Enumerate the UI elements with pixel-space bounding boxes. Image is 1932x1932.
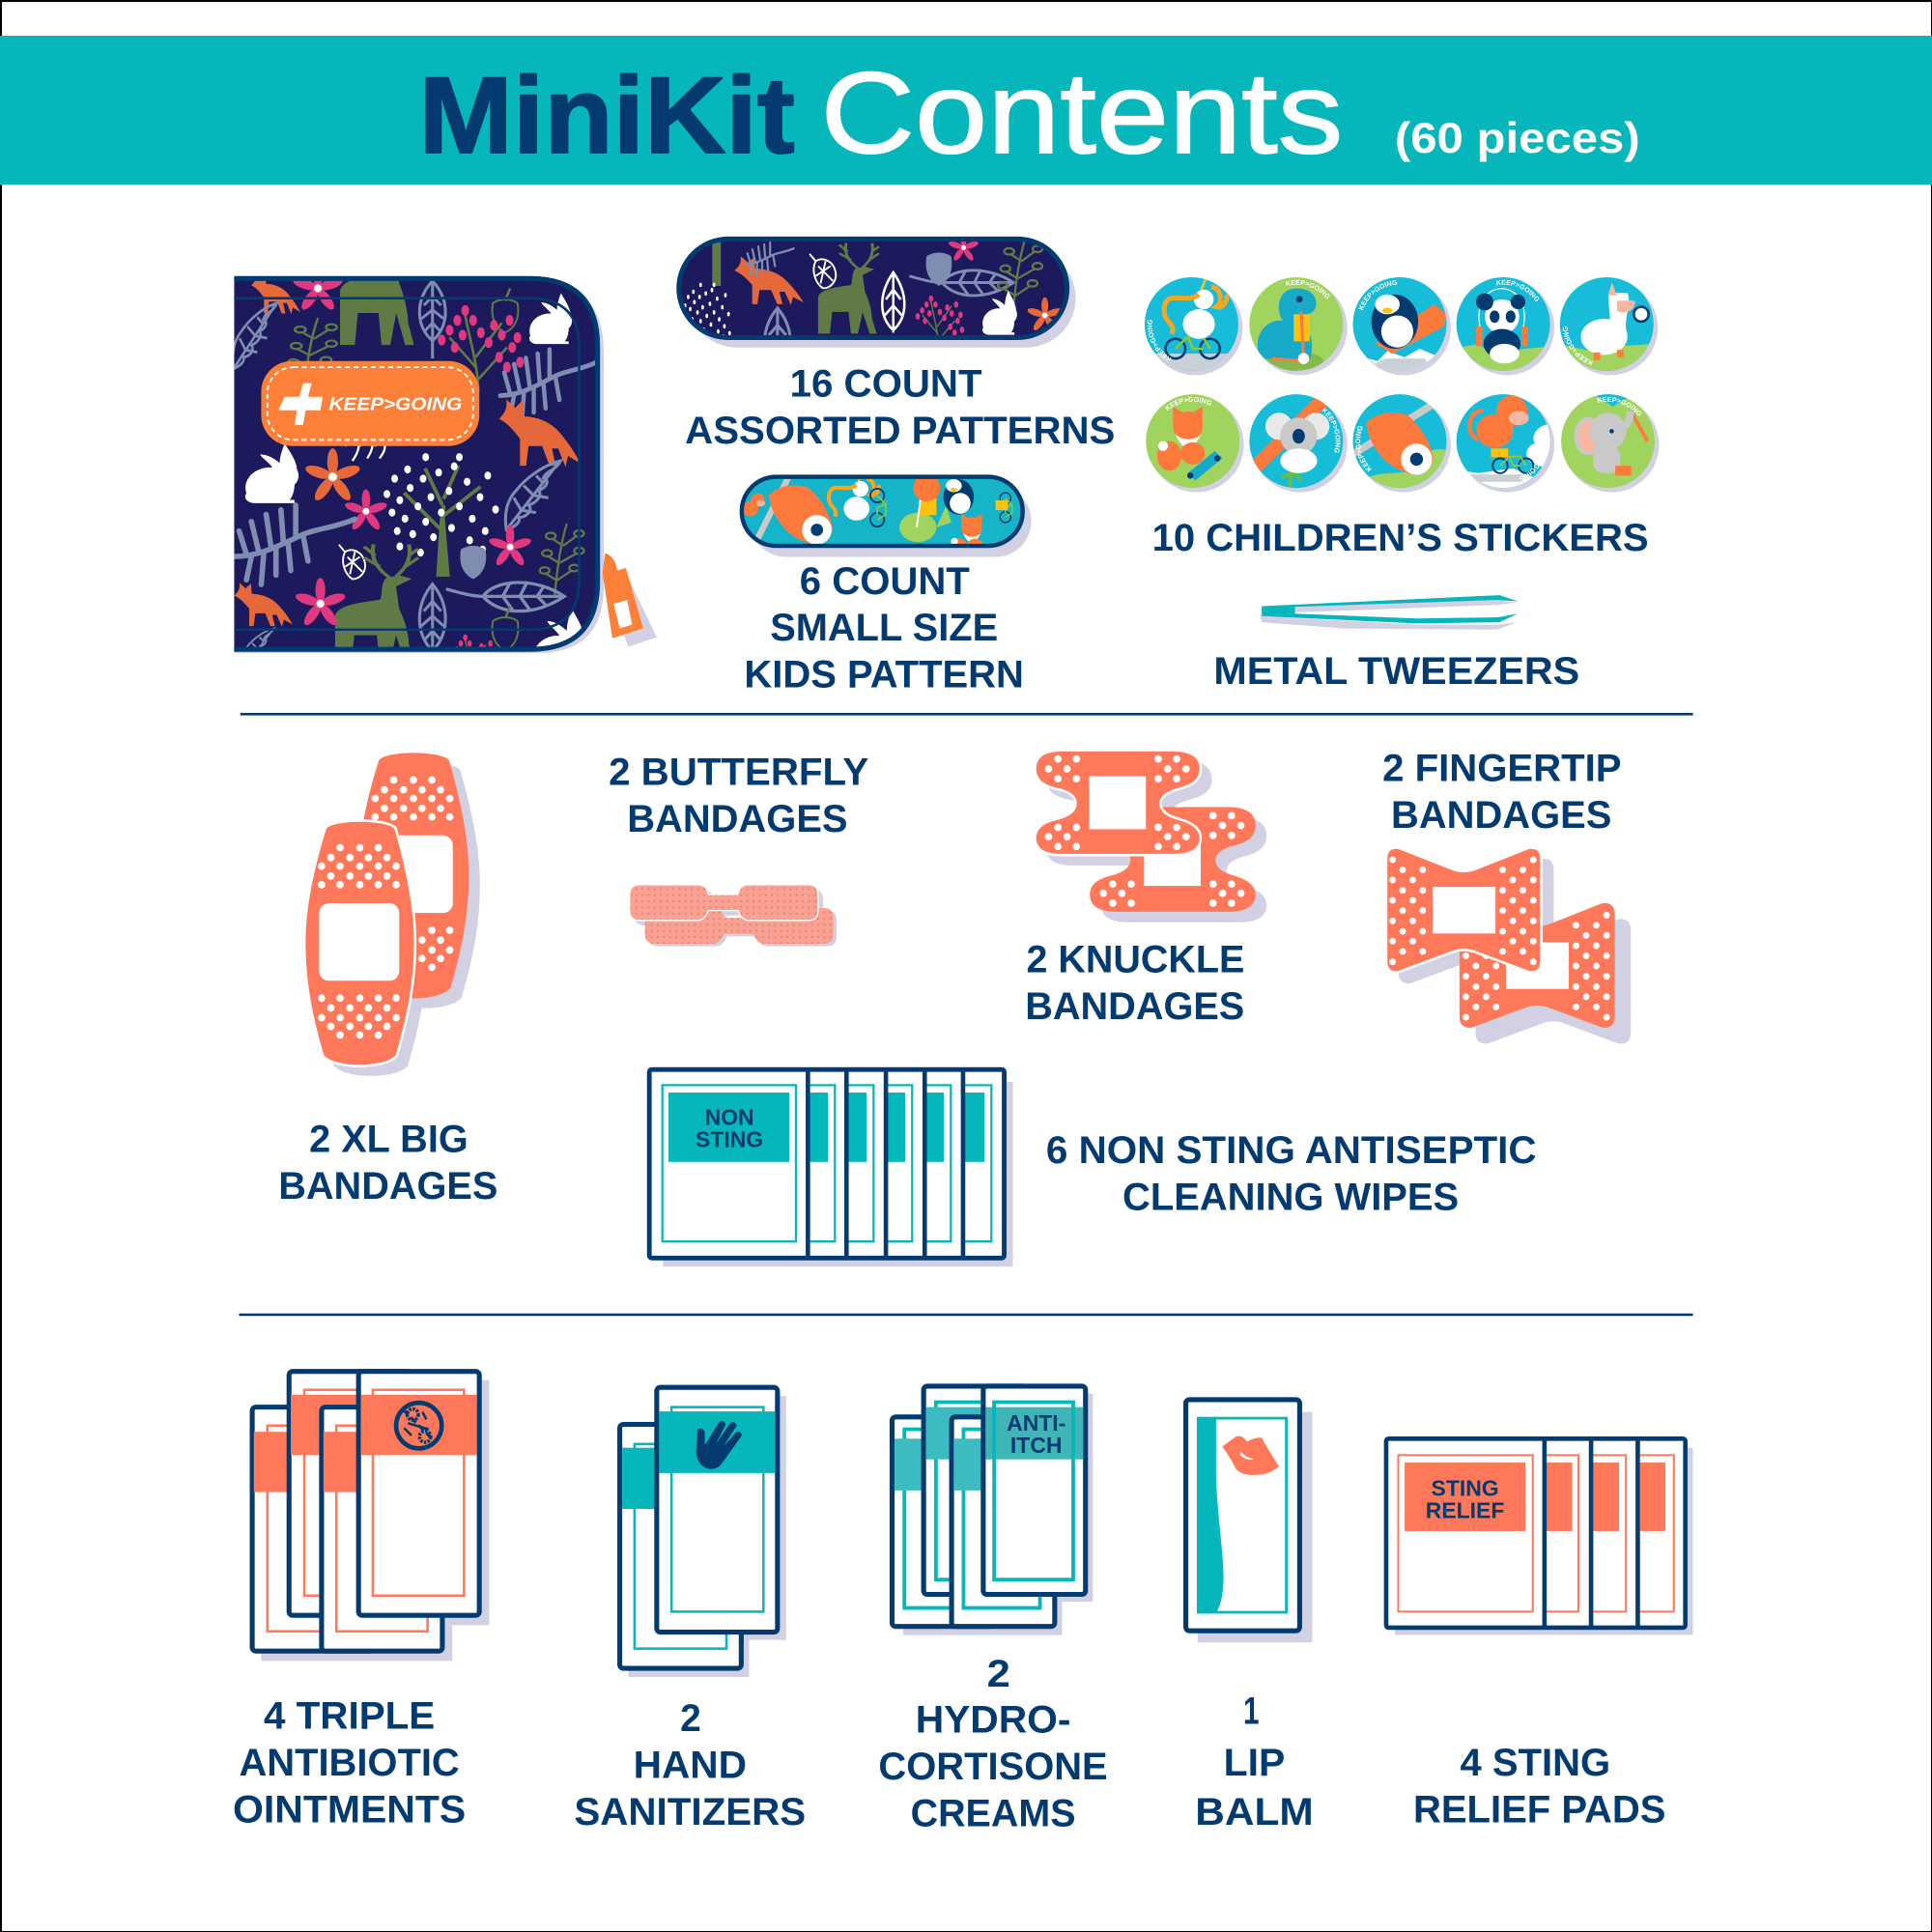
sticker: monkey: [1457, 394, 1554, 493]
panel: hand sanitizers: [620, 1387, 786, 1677]
label: 2: 2: [987, 1652, 1010, 1695]
sticker: dinosaur: [1249, 277, 1348, 375]
sticker: fox: [1146, 394, 1244, 493]
label: stickers: 10 CHILDREN’S STICKERS: [1152, 516, 1649, 559]
label: 6 non sting antiseptic: 6 NON STING ANTISEPTIC: [1046, 1128, 1537, 1172]
back knuckle bandage: [1090, 807, 1256, 912]
sticker: llama: [1559, 277, 1658, 375]
sticker: koala: KEEP>GOING: [1321, 408, 1341, 453]
cream packet C: [952, 1417, 1055, 1627]
sticker: monkey: KEEP>GOING: [1520, 464, 1540, 481]
panel: 16 count bandage: [676, 236, 1076, 348]
panel: 6 count kids bandage: [739, 469, 1032, 558]
ointment packet B: [289, 1372, 410, 1615]
label: kids pattern: KIDS PATTERN: [744, 653, 1024, 696]
label: relief pads: RELIEF PADS: [1413, 1787, 1665, 1831]
label: 2: 2: [680, 1696, 701, 1740]
front knuckle bandage: [1035, 751, 1201, 855]
panel: antiseptic wipes: [649, 1069, 1012, 1266]
sticker: elephant: [1561, 394, 1660, 493]
label: bandages: BANDAGES: [627, 797, 848, 840]
back butterfly bandage: [645, 908, 834, 944]
zipper pull: [603, 554, 657, 647]
sticker: panda: KEEP>GOING: [1495, 280, 1540, 301]
label: hydro: HYDRO-: [916, 1697, 1070, 1741]
cream packet D: [983, 1386, 1086, 1595]
pouch label tag: [261, 361, 479, 446]
sticker: llama: KEEP>GOING: [1563, 327, 1593, 365]
icon: hand: [696, 1421, 742, 1469]
sticker: unicorn: [1144, 277, 1242, 375]
label: 6 count: 6 COUNT: [800, 559, 970, 603]
packet label: sting: STING: [1432, 1475, 1499, 1500]
label: tweezers: METAL TWEEZERS: [1213, 649, 1579, 693]
label: ointments: OINTMENTS: [233, 1787, 466, 1831]
panel: sting relief pads: [1386, 1438, 1693, 1635]
panel: children's stickers: [1144, 277, 1660, 493]
icon: tweezers: [1260, 595, 1518, 630]
packet label: non sting: NON: [705, 1105, 754, 1130]
label: assorted patterns: ASSORTED PATTERNS: [685, 409, 1115, 452]
sticker: penguin: [1352, 277, 1451, 375]
panel: hydrocortisone creams: [892, 1386, 1093, 1635]
sticker: penguin: KEEP>GOING: [1358, 280, 1397, 311]
sanitizer packet back: [620, 1424, 741, 1668]
divider: [239, 1314, 1693, 1316]
back fingertip bandage: [1460, 903, 1615, 1028]
label: creams: CREAMS: [911, 1791, 1076, 1834]
panel: pouch: [234, 276, 657, 653]
packet label: sting: STING: [696, 1126, 763, 1151]
pouch label tag: KEEP>GOING: [329, 394, 462, 414]
sanitizer packet front: [657, 1387, 778, 1633]
label: antibiotic: ANTIBIOTIC: [239, 1741, 460, 1784]
label: 4 triple: 4 TRIPLE: [264, 1694, 435, 1738]
label: small size: SMALL SIZE: [770, 606, 998, 649]
panel: triple antibiotic ointments: [252, 1372, 489, 1661]
icon: lips: [1222, 1436, 1279, 1475]
label: balm: BALM: [1195, 1790, 1314, 1833]
cream packet A: [892, 1417, 994, 1627]
label: 1: 1: [1243, 1689, 1260, 1732]
sticker: panda: [1457, 277, 1554, 375]
label: bandages: BANDAGES: [278, 1164, 497, 1208]
cream packet B: [923, 1386, 1026, 1595]
label: 2 fingertip: 2 FINGERTIP: [1382, 747, 1622, 790]
label: 16 count: 16 COUNT: [790, 362, 982, 406]
panel: lip balm: [1186, 1400, 1312, 1642]
panel: knuckle bandages: [1035, 751, 1266, 923]
packet label: itch: ITCH: [1010, 1433, 1062, 1458]
sticker: koala: [1249, 394, 1348, 493]
panel: XL bandages: [304, 753, 480, 1076]
label: cortisone: CORTISONE: [878, 1745, 1108, 1788]
divider: [241, 713, 1693, 716]
sticker: dinosaur: KEEP>GOING: [1285, 280, 1329, 299]
packet label: anti: ANTI-: [1007, 1410, 1065, 1435]
label: 2 butterfly: 2 BUTTERFLY: [609, 751, 868, 793]
ointment packet A: [252, 1407, 373, 1651]
sticker: elephant: KEEP>GOING: [1597, 396, 1642, 415]
label: 4 sting: 4 STING: [1460, 1741, 1610, 1784]
subtitle: piece count: (60 pieces): [1395, 115, 1640, 162]
sticker: sloth: [1352, 394, 1451, 493]
title: Contents: Contents: [820, 48, 1343, 178]
bandage forest pattern: [681, 242, 1065, 335]
front fingertip bandage: [1386, 847, 1542, 972]
label: 2 knuckle: 2 KNUCKLE: [1026, 937, 1244, 980]
label: bandages: BANDAGES: [1391, 793, 1611, 837]
panel: fingertip bandages: [1386, 847, 1631, 1043]
label: cleaning wipes: CLEANING WIPES: [1122, 1176, 1459, 1219]
sting relief stacked packets: [1547, 1463, 1665, 1531]
title banner: [0, 36, 1932, 185]
wipes stacked packets: [809, 1093, 984, 1162]
ointment packet D: [358, 1372, 479, 1615]
sticker: unicorn: KEEP>GOING: [1148, 320, 1172, 362]
panel: butterfly bandages: [630, 885, 837, 947]
label: lip: LIP: [1224, 1741, 1285, 1784]
label: XL big: 2 XL BIG: [309, 1118, 469, 1161]
sticker: fox: KEEP>GOING: [1165, 396, 1211, 412]
bandage kids pattern: [744, 479, 1020, 544]
pouch forest pattern: [234, 280, 595, 647]
ointment packet C: [322, 1407, 442, 1651]
label: sanitizers: SANITIZERS: [574, 1790, 806, 1833]
back XL bandage: [358, 753, 469, 998]
label: hand: HAND: [634, 1744, 747, 1787]
sticker: sloth: KEEP>GOING: [1355, 425, 1372, 471]
front XL bandage: [304, 820, 415, 1066]
front butterfly bandage: [630, 885, 818, 921]
balm tube: [1198, 1418, 1224, 1612]
title: MiniKit: MiniKit: [419, 54, 795, 176]
packet label: relief: RELIEF: [1426, 1497, 1504, 1522]
label: bandages: BANDAGES: [1025, 984, 1244, 1028]
icon: no germs: [396, 1403, 441, 1448]
